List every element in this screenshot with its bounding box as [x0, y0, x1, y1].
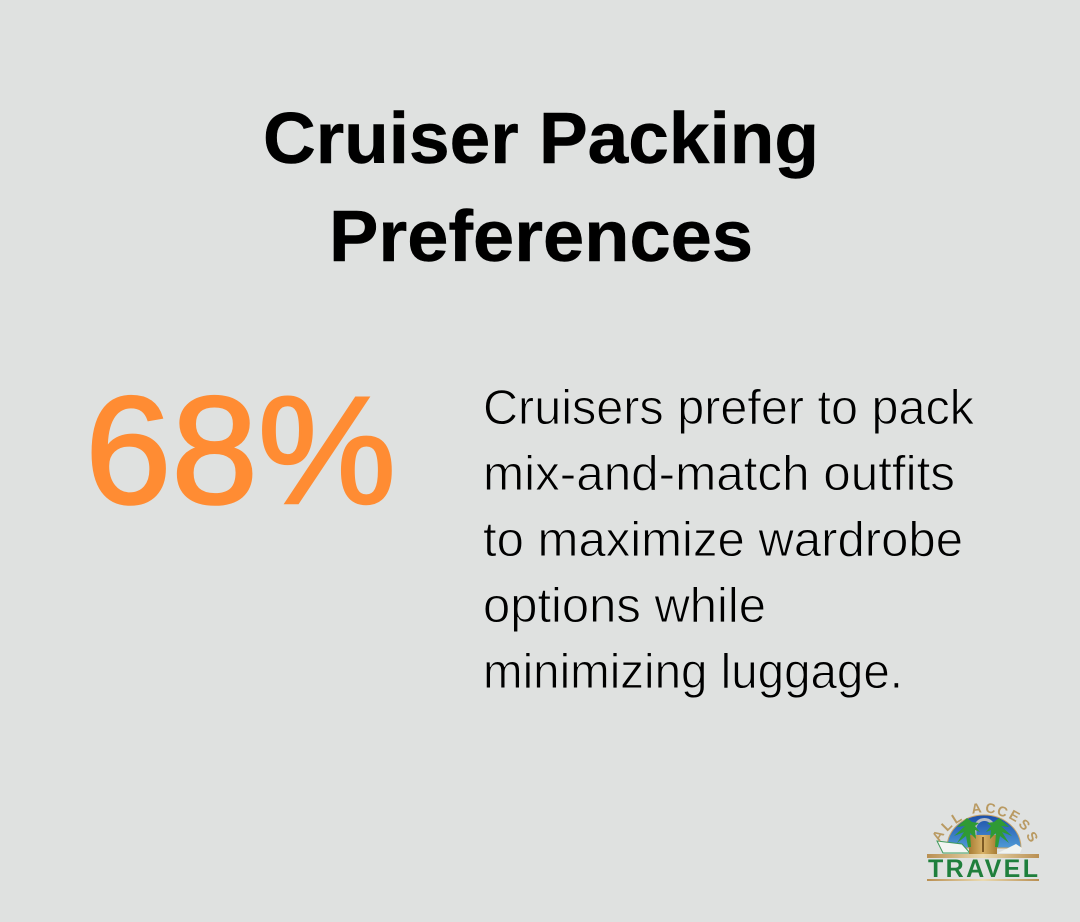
logo wordmark: TRAVEL	[928, 855, 1038, 883]
logo arc text: S	[1016, 816, 1033, 833]
description text: to maximize wardrobe	[483, 513, 963, 567]
logo arc text	[928, 799, 1042, 845]
description text: minimizing luggage.	[483, 645, 903, 699]
logo gold rules	[927, 854, 1039, 881]
statistic: 68%: 68%	[85, 365, 396, 536]
description text: options while	[483, 579, 766, 633]
title	[263, 99, 819, 277]
logo arc text: L	[938, 816, 955, 834]
logo arc text: A	[970, 799, 982, 817]
logo arc text: C	[995, 802, 1010, 820]
logo globe	[947, 815, 1021, 848]
logo arc text: A	[928, 827, 947, 844]
description text: mix-and-match outfits	[483, 447, 955, 501]
logo arc text: C	[985, 800, 996, 817]
title: Preferences	[329, 197, 753, 277]
logo palm trees	[954, 818, 1012, 847]
description text: Cruisers prefer to pack	[483, 381, 974, 435]
title: Cruiser Packing	[263, 99, 819, 179]
logo padlock	[969, 820, 997, 854]
logo arc text: L	[948, 808, 965, 827]
logo: All Access Travel	[927, 799, 1042, 883]
logo arc text: S	[1023, 829, 1042, 845]
logo boats	[937, 841, 1022, 853]
logo arc text: E	[1006, 806, 1023, 825]
description text	[483, 381, 974, 699]
